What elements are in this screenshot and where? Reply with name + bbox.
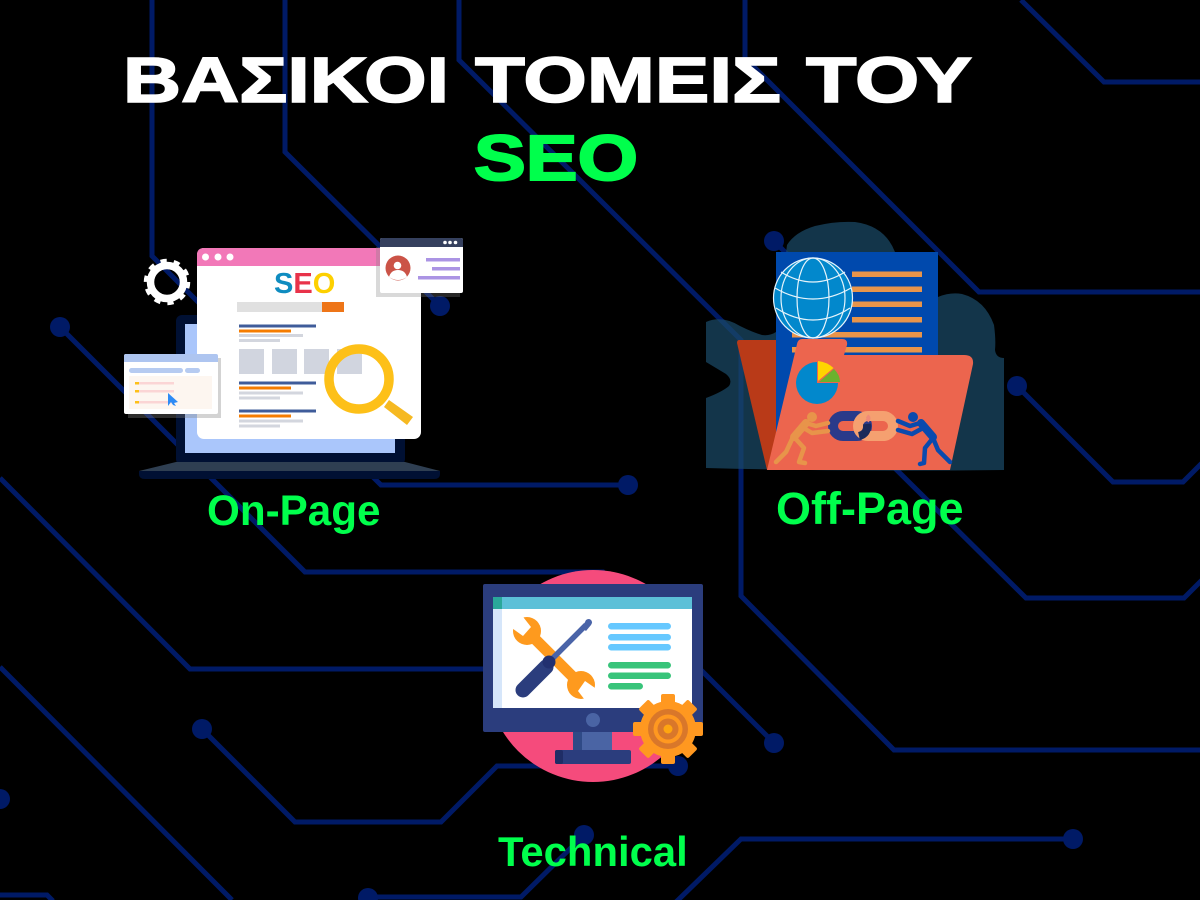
icon: wrench <box>509 613 598 704</box>
label: On-Page: On-Page <box>207 487 380 534</box>
label: Technical: Technical <box>498 828 688 875</box>
chain links <box>833 416 893 436</box>
monitor stand <box>555 732 631 764</box>
profile card <box>376 238 463 297</box>
SEO browser page <box>197 248 421 439</box>
icon: white gear <box>146 262 188 302</box>
page heading SEO: SEO <box>274 268 335 300</box>
pink circle <box>487 570 699 782</box>
illustration: Off-Page folder with links <box>706 222 1004 471</box>
dark cloud backdrop <box>706 222 1004 471</box>
icon: cursor <box>168 393 178 406</box>
folder back <box>737 340 776 470</box>
title <box>123 44 972 194</box>
icon: globe <box>774 258 852 338</box>
title line: SEO: SEO <box>474 122 638 194</box>
blue text lines <box>608 623 671 650</box>
label: Off-Page: Off-Page <box>776 483 964 534</box>
title line: ΒΑΣΙΚΟΙ ΤΟΜΕΙΣ ΤΟΥ: ΤΟΥ <box>806 44 972 116</box>
figure pulling left <box>776 412 828 463</box>
icon: magnifying glass <box>329 349 413 425</box>
figure pulling right <box>898 412 950 464</box>
folder front <box>767 339 973 470</box>
title line: ΒΑΣΙΚΟΙ ΤΟΜΕΙΣ ΤΟΥ: ΤΟΜΕΙΣ <box>475 44 781 116</box>
green text lines <box>608 662 671 690</box>
small browser card with cursor <box>124 354 221 418</box>
icon: screwdriver <box>523 619 592 690</box>
illustration: On-Page laptop with SEO page <box>124 238 463 479</box>
pie chart <box>796 361 840 404</box>
icon: orange gear <box>633 694 703 764</box>
blue document <box>776 252 938 470</box>
title line: ΒΑΣΙΚΟΙ ΤΟΜΕΙΣ ΤΟΥ <box>123 44 972 116</box>
laptop <box>139 315 440 479</box>
monitor <box>483 584 703 732</box>
illustration: Technical monitor with tools <box>483 570 703 782</box>
title line: ΒΑΣΙΚΟΙ ΤΟΜΕΙΣ ΤΟΥ: ΒΑΣΙΚΟΙ <box>123 44 449 116</box>
